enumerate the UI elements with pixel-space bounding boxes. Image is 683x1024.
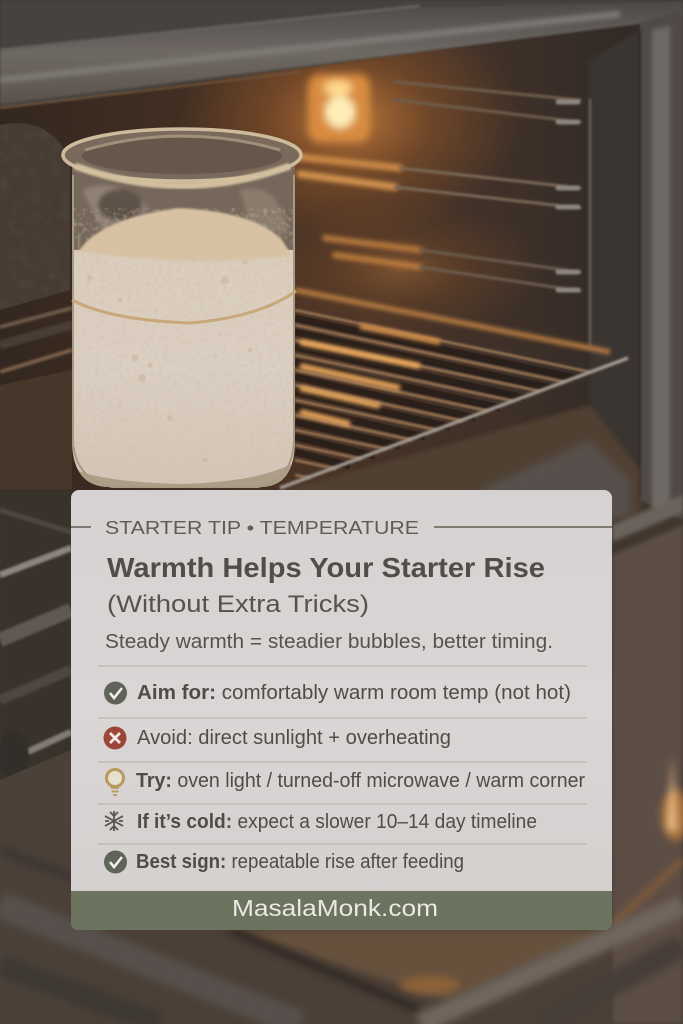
left rack behind jar — [0, 308, 72, 372]
panel title: Warmth Helps Your Starter Rise — [107, 552, 545, 583]
icon: snowflake — [105, 811, 123, 831]
oven floor under rack — [285, 405, 640, 560]
oven lamp — [308, 74, 370, 142]
wire oven rack — [280, 290, 628, 488]
light glow on back wall — [180, 0, 520, 240]
glass upper body — [72, 165, 295, 250]
sourdough starter jar — [63, 129, 301, 490]
footer band — [71, 891, 612, 930]
panel eyebrow: starter tip: STARTER TIP • TEMPERATURE — [105, 517, 419, 538]
top oven frame — [0, 0, 683, 108]
footer band: MasalaMonk.com — [232, 895, 438, 921]
oven door edges in foreground — [0, 850, 683, 1024]
row: aim for: Aim for: comfortably warm room temp (not hot) — [137, 682, 571, 704]
icon: check — [104, 850, 127, 874]
starter dough — [72, 208, 295, 490]
row: best sign: Best sign: repeatable rise after feeding — [136, 851, 464, 873]
jar rim — [63, 129, 301, 186]
icon: light bulb — [106, 770, 124, 795]
panel subtitle: (Without Extra Tricks) — [107, 591, 369, 618]
wire shelf rails on back wall — [300, 82, 590, 345]
icon: check — [104, 682, 127, 704]
row: try: Try: oven light / turned-off microwave / warm corner — [136, 770, 585, 792]
info panel — [71, 490, 612, 930]
oven back wall — [0, 23, 640, 500]
right side floor — [612, 525, 683, 1024]
bubbles in dough — [87, 260, 252, 462]
icon: cross — [104, 726, 126, 750]
intro line: Steady warmth = steadier bubbles, better timing. — [105, 630, 553, 653]
warm floor reflections — [400, 755, 683, 994]
row dividers — [98, 666, 587, 844]
smears on glass — [82, 186, 288, 235]
warm glow above rack — [260, 200, 540, 340]
glass side highlights — [73, 175, 294, 487]
side wall of oven — [590, 30, 640, 490]
right oven frame — [640, 10, 683, 520]
floor below panel — [0, 750, 71, 1024]
twine band — [72, 291, 296, 323]
lower-left metal rack — [0, 490, 71, 790]
row: avoid: Avoid: direct sunlight + overheating — [137, 727, 451, 749]
dark loaf at left — [0, 115, 70, 315]
row: if it's cold: If it’s cold: expect a slower 10–14 day timeline — [137, 811, 537, 833]
